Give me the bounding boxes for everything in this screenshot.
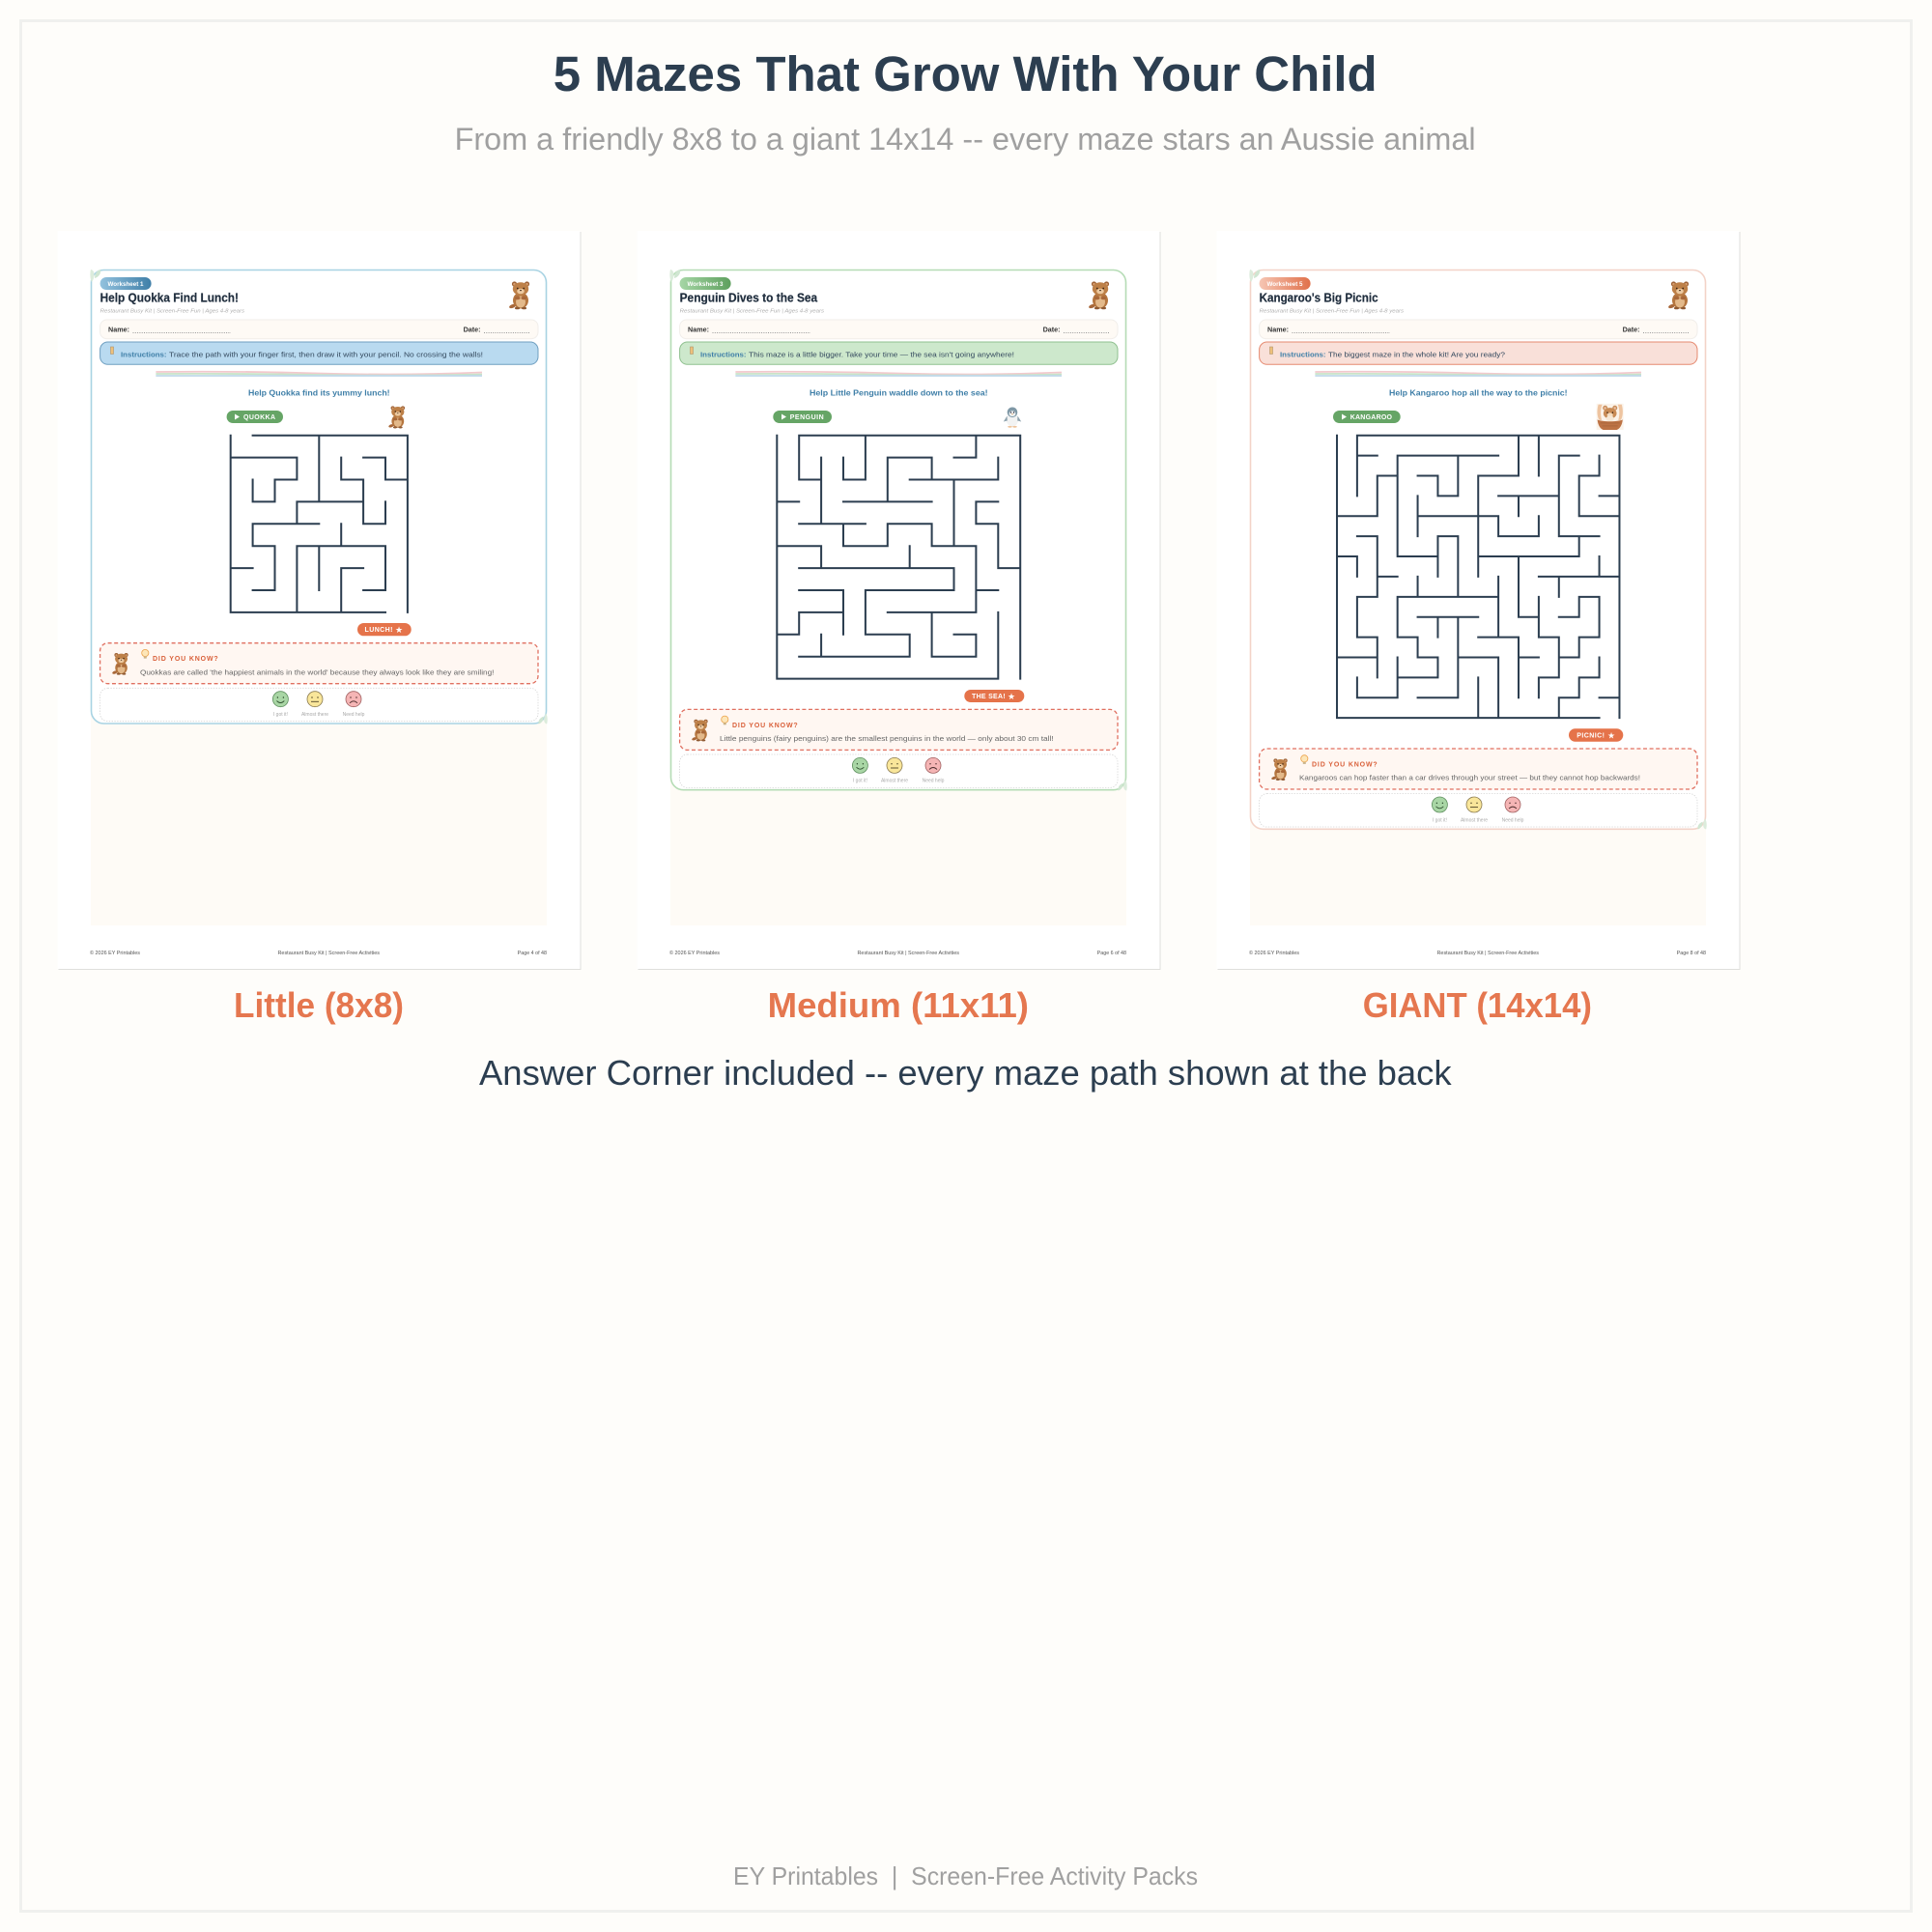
- finish pill: LUNCH!: [365, 627, 392, 634]
- instructions bar: The biggest maze in the whole kit! Are you ready?: [1328, 350, 1505, 358]
- page footer: © 2026 EY Printables: [1249, 950, 1299, 956]
- start pill: [1333, 411, 1401, 423]
- instructions bar: Trace the path with your finger first, then draw it with your pencil. No crossing the walls!: [169, 350, 483, 358]
- finish pill: ★: [395, 626, 403, 636]
- self check row: Need help: [343, 712, 365, 718]
- page footer: Page 4 of 48: [518, 951, 547, 956]
- instructions bar: [680, 342, 1118, 364]
- instructions bar: This maze is a little bigger. Take your time — the sea isn't going anywhere!: [749, 350, 1014, 358]
- self check row: Need help: [923, 779, 945, 784]
- name and date row: Name:: [108, 327, 129, 334]
- self check row: Need help: [1502, 817, 1524, 823]
- cream page body: [1250, 819, 1706, 925]
- page footer: Restaurant Busy Kit | Screen-Free Activities: [278, 951, 380, 956]
- did you know callout: DID YOU KNOW?: [1312, 762, 1378, 769]
- icon: header quokka: [1668, 281, 1689, 309]
- page footer: Restaurant Busy Kit | Screen-Free Activities: [858, 951, 959, 956]
- worksheet badge: [100, 277, 152, 290]
- maze prompt: Help Little Penguin waddle down to the sea!: [810, 389, 988, 398]
- finish pill: ★: [1607, 731, 1615, 741]
- panel: worksheet page 2 medium maze: [638, 231, 1161, 970]
- brand footer: EY Printables | Screen-Free Activity Packs: [733, 1861, 1198, 1890]
- icon: corner leaf bottom: [1697, 818, 1707, 829]
- worksheet frame: [1250, 270, 1706, 829]
- title: 5 Mazes That Grow With Your Child: [554, 46, 1378, 101]
- wavy divider: [1315, 372, 1641, 376]
- page sheet: [58, 231, 580, 969]
- name and date row: [100, 320, 538, 339]
- name and date row: Name:: [1267, 327, 1289, 334]
- maze prompt: Help Quokka find its yummy lunch!: [248, 389, 390, 398]
- page shadow: [638, 232, 1161, 970]
- did you know callout: Little penguins (fairy penguins) are the smallest penguins in the world — only about 30 cm tall!: [720, 734, 1054, 743]
- start pill: KANGAROO: [1350, 414, 1393, 421]
- did you know callout: [680, 709, 1118, 750]
- maze 14x14: [1337, 436, 1619, 718]
- instructions bar: [100, 342, 538, 364]
- did you know callout: DID YOU KNOW?: [153, 656, 218, 663]
- worksheet title: Kangaroo's Big Picnic: [1260, 292, 1378, 305]
- finish pill: [357, 623, 412, 636]
- wavy divider: [156, 372, 482, 376]
- worksheet badge: [1260, 277, 1311, 290]
- icon: penguin mascot: [1004, 408, 1021, 428]
- did you know callout: Quokkas are called 'the happiest animals in the world' because they always look like they are smiling!: [140, 668, 494, 676]
- icon: corner leaf: [669, 270, 680, 282]
- page shadow: [58, 232, 582, 970]
- self check row: I got it!: [1433, 817, 1447, 823]
- finish pill: ★: [1008, 693, 1015, 702]
- name and date row: Name:: [688, 327, 709, 334]
- page footer: [90, 950, 547, 956]
- page footer: [1249, 950, 1706, 956]
- did you know callout: Kangaroos can hop faster than a car drives through your street — but they cannot hop backwards!: [1299, 774, 1640, 782]
- worksheet badge: Worksheet 3: [688, 281, 724, 288]
- maze prompt: Help Kangaroo hop all the way to the picnic!: [1389, 389, 1568, 398]
- finish pill: PICNIC!: [1577, 733, 1605, 740]
- instructions bar: Instructions:: [1280, 350, 1325, 358]
- start pill: QUOKKA: [243, 414, 275, 421]
- caption: little: Little (8x8): [234, 985, 404, 1025]
- instructions bar: Instructions:: [700, 350, 746, 358]
- worksheet byline: Restaurant Busy Kit | Screen-Free Fun | Ages 4-8 years: [1260, 309, 1405, 315]
- page footer: [669, 950, 1126, 956]
- name and date row: Date:: [1043, 327, 1061, 334]
- icon: corner leaf bottom: [1118, 780, 1127, 790]
- name and date row: Date:: [1623, 327, 1640, 334]
- page footer: Page 6 of 48: [1097, 951, 1126, 956]
- caption: giant: GIANT (14x14): [1363, 985, 1592, 1025]
- worksheet badge: Worksheet 5: [1267, 281, 1303, 288]
- icon: corner leaf bottom: [538, 713, 548, 724]
- icon: header quokka: [1089, 281, 1109, 309]
- page footer: Restaurant Busy Kit | Screen-Free Activities: [1437, 951, 1539, 956]
- cream page body: [91, 715, 547, 925]
- subtitle: From a friendly 8x8 to a giant 14x14 -- every maze stars an Aussie animal: [455, 122, 1476, 156]
- worksheet badge: [680, 277, 731, 290]
- maze 11x11: [777, 436, 1020, 679]
- icon: kangaroo mascot: [1597, 404, 1624, 430]
- worksheet frame: [91, 270, 547, 724]
- icon: corner leaf: [90, 270, 100, 282]
- self check row: [100, 688, 538, 722]
- worksheet title: Penguin Dives to the Sea: [680, 292, 818, 305]
- self check row: Almost there: [1461, 817, 1488, 823]
- panel: worksheet page 1 little maze: [58, 231, 582, 970]
- page sheet: [1217, 231, 1739, 969]
- icon: header quokka: [509, 281, 529, 309]
- worksheet title: Help Quokka Find Lunch!: [100, 292, 239, 305]
- name and date row: [1260, 320, 1697, 339]
- start pill: [227, 411, 283, 423]
- maze 8x8: [231, 436, 408, 612]
- icon: quokka mascot: [388, 406, 405, 428]
- page sheet: [638, 231, 1159, 969]
- finish pill: [1569, 728, 1623, 742]
- instructions bar: Instructions:: [121, 350, 166, 358]
- did you know callout: DID YOU KNOW?: [732, 723, 798, 729]
- finish pill: [964, 690, 1024, 702]
- self check row: [680, 754, 1118, 787]
- finish pill: THE SEA!: [972, 694, 1006, 700]
- page footer: © 2026 EY Printables: [669, 950, 720, 956]
- start pill: [773, 411, 832, 423]
- cream page body: [670, 781, 1126, 925]
- wavy divider: [735, 372, 1062, 376]
- caption: medium: Medium (11x11): [768, 985, 1029, 1025]
- name and date row: [680, 320, 1118, 339]
- self check row: I got it!: [853, 779, 867, 784]
- did you know callout: [1260, 749, 1697, 789]
- page shadow: [1217, 232, 1741, 970]
- name and date row: Date:: [464, 327, 481, 334]
- self check row: [1260, 794, 1697, 827]
- worksheet frame: [670, 270, 1126, 790]
- icon: corner leaf: [1249, 270, 1260, 282]
- panel: worksheet page 3 giant maze: [1217, 231, 1741, 970]
- worksheet byline: Restaurant Busy Kit | Screen-Free Fun | Ages 4-8 years: [680, 309, 825, 315]
- instructions bar: [1260, 342, 1697, 364]
- self check row: I got it!: [273, 712, 288, 718]
- self check row: Almost there: [881, 779, 908, 784]
- did you know callout: [100, 643, 538, 684]
- answer corner note: Answer Corner included -- every maze path shown at the back: [479, 1053, 1453, 1093]
- start pill: PENGUIN: [790, 414, 824, 421]
- page footer: Page 8 of 48: [1677, 951, 1706, 956]
- page footer: © 2026 EY Printables: [90, 950, 140, 956]
- self check row: Almost there: [301, 712, 328, 718]
- worksheet badge: Worksheet 1: [108, 281, 144, 288]
- worksheet byline: Restaurant Busy Kit | Screen-Free Fun | Ages 4-8 years: [100, 309, 245, 315]
